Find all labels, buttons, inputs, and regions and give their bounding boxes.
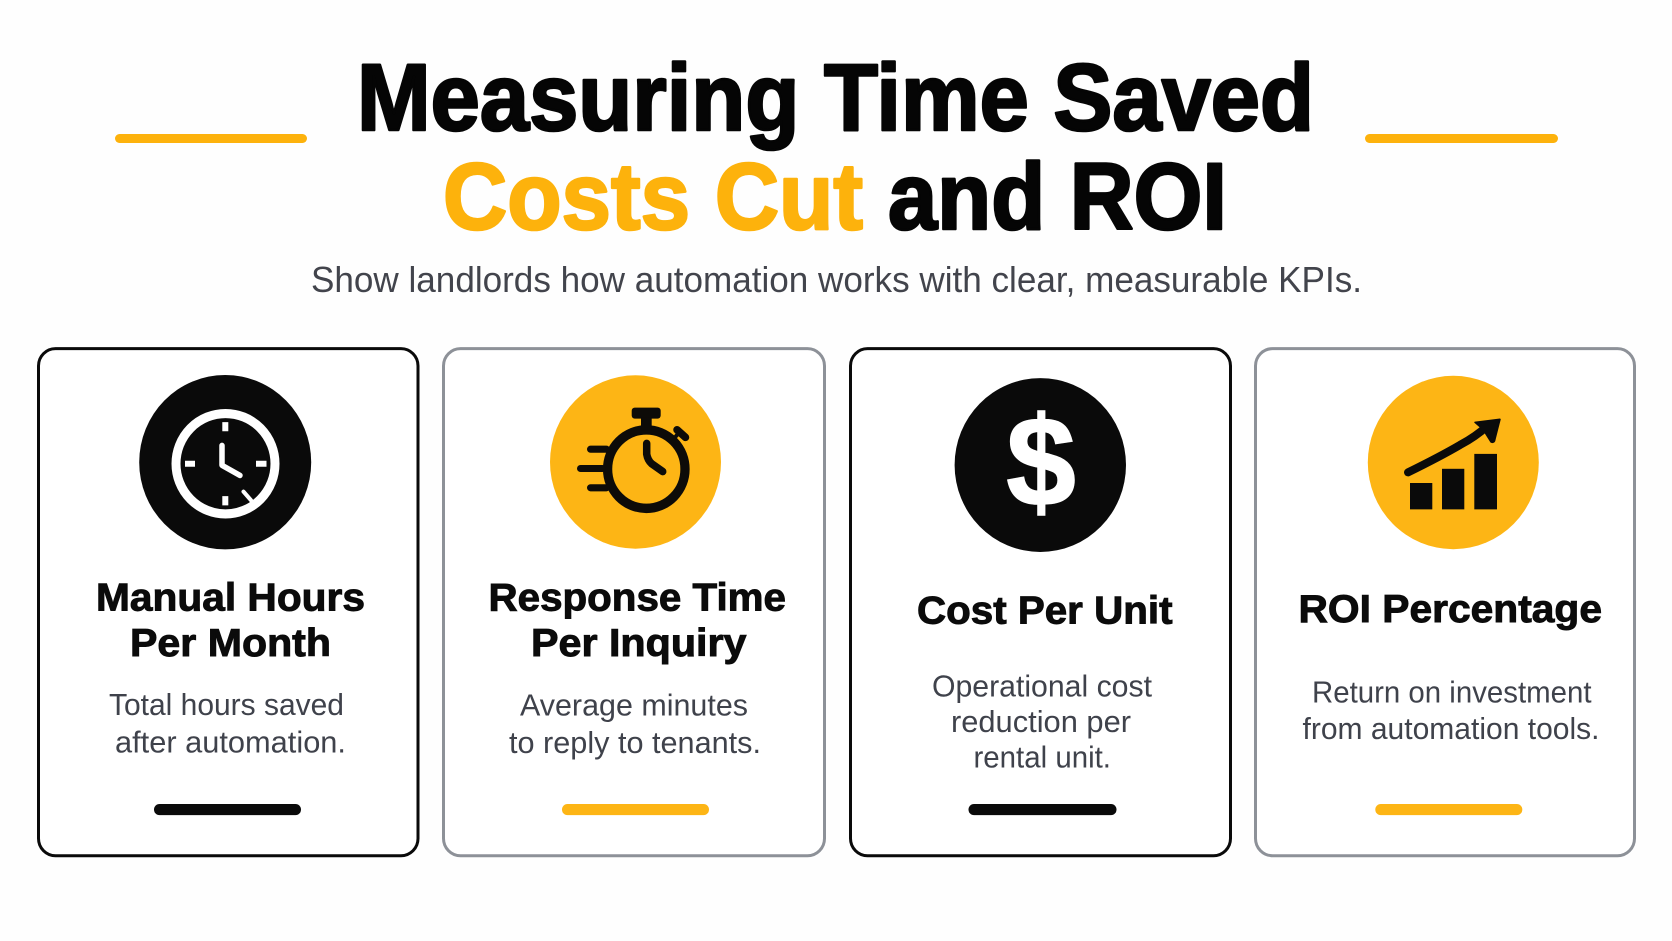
heading: response time per inquiry [488, 576, 786, 665]
accent bar [562, 804, 709, 815]
description: operational cost: reduction per [951, 706, 1131, 739]
description: operational cost [932, 670, 1153, 775]
heading: manual hours per month: Manual Hours [96, 576, 365, 619]
heading: roi percentage: ROI Percentage [1298, 588, 1602, 631]
description: return on investment: Return on investment [1312, 676, 1592, 710]
description: average minutes: Average minutes [520, 690, 748, 723]
accent bar [968, 804, 1116, 815]
panel: manual hours per month [38, 349, 418, 856]
heading: manual hours per month: Per Month [130, 622, 331, 665]
title decoration: right line [1365, 134, 1558, 143]
heading: cost per unit: Cost Per Unit [917, 589, 1173, 632]
subtitle: Show landlords how automation works with clear, measurable KPIs. [311, 259, 1362, 300]
description: total hours saved [109, 689, 346, 759]
description: average minutes [509, 690, 761, 760]
description: operational cost: rental unit. [974, 741, 1111, 775]
title: and ROI [888, 144, 1227, 250]
heading: response time per inquiry: Per Inquiry [531, 622, 747, 665]
panel: response time per inquiry [444, 349, 824, 856]
panel: roi percentage [1256, 349, 1634, 856]
icon: dollar [955, 378, 1126, 552]
icon: stopwatch [550, 375, 721, 549]
description: total hours saved: Total hours saved [109, 689, 344, 722]
title [357, 45, 1314, 250]
icon: dollar: $ [1006, 391, 1076, 533]
description: total hours saved: after automation. [115, 726, 346, 759]
icon: clock [139, 375, 311, 549]
panel: cost per unit [850, 349, 1230, 856]
title: Measuring Time Saved [357, 45, 1314, 151]
description: operational cost: Operational cost [932, 670, 1153, 704]
icon: growth chart [1368, 376, 1539, 549]
heading: response time per inquiry: Response Time [488, 576, 786, 619]
title decoration: left line [115, 134, 307, 143]
description: return on investment [1303, 676, 1600, 746]
description: average minutes: to reply to tenants. [509, 727, 761, 760]
description: return on investment: from automation tools. [1303, 713, 1600, 746]
accent bar [154, 804, 301, 815]
accent bar [1375, 804, 1522, 815]
heading: manual hours per month [96, 576, 365, 665]
title: Costs Cut [443, 144, 863, 250]
